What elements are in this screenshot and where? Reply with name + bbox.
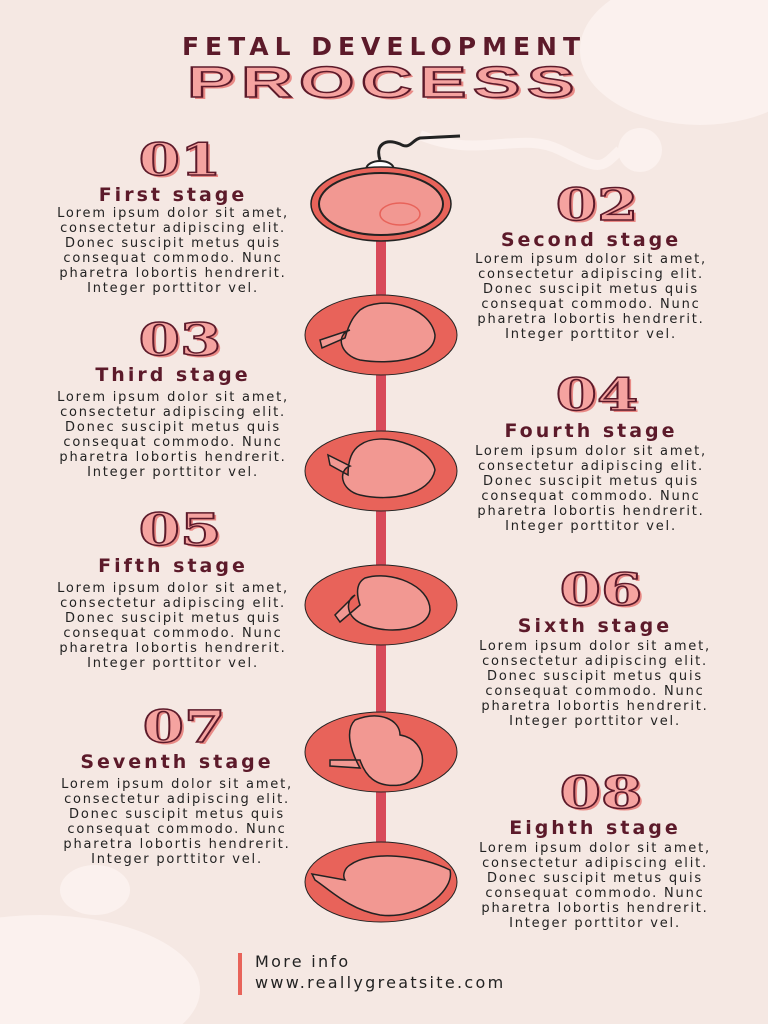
text: 07 <box>143 702 225 753</box>
timeline line <box>376 235 386 865</box>
text: consectetur adipiscing elit. <box>60 221 286 236</box>
text: Donec suscipit metus quis <box>65 420 281 435</box>
text: consequat commodo. Nunc <box>67 822 287 837</box>
title <box>182 32 586 107</box>
text: consequat commodo. Nunc <box>481 297 701 312</box>
text: Integer porttitor vel. <box>509 916 681 931</box>
text: Fourth stage <box>504 420 678 442</box>
text: consequat commodo. Nunc <box>63 626 283 641</box>
text: 08 <box>560 768 642 819</box>
stage 01 <box>57 135 289 296</box>
text: consectetur adipiscing elit. <box>60 596 286 611</box>
text: consectetur adipiscing elit. <box>60 405 286 420</box>
stage 02 <box>475 180 707 342</box>
text: Third stage <box>95 364 251 386</box>
text: pharetra lobortis hendrerit. <box>477 504 705 519</box>
text: consectetur adipiscing elit. <box>478 267 704 282</box>
text: consequat commodo. Nunc <box>485 886 705 901</box>
text: Integer porttitor vel. <box>509 714 681 729</box>
text: Lorem ipsum dolor sit amet, <box>475 252 707 267</box>
text: pharetra lobortis hendrerit. <box>59 266 287 281</box>
embryo icons <box>304 294 458 922</box>
text: Eighth stage <box>509 817 681 839</box>
text: Lorem ipsum dolor sit amet, <box>479 639 711 654</box>
text: Integer porttitor vel. <box>91 852 263 867</box>
text: Lorem ipsum dolor sit amet, <box>479 841 711 856</box>
text: Donec suscipit metus quis <box>65 611 281 626</box>
text: Donec suscipit metus quis <box>483 474 699 489</box>
text: Donec suscipit metus quis <box>487 871 703 886</box>
text: pharetra lobortis hendrerit. <box>481 901 709 916</box>
footer: more info <box>238 952 505 995</box>
text: 03 <box>139 315 221 366</box>
text: consequat commodo. Nunc <box>481 489 701 504</box>
stage 08 <box>479 768 711 931</box>
text: pharetra lobortis hendrerit. <box>63 837 291 852</box>
text: Lorem ipsum dolor sit amet, <box>57 390 289 405</box>
stage 03 <box>57 315 289 480</box>
text: 05 <box>139 505 221 556</box>
text: pharetra lobortis hendrerit. <box>59 641 287 656</box>
text: consectetur adipiscing elit. <box>482 856 708 871</box>
text: Donec suscipit metus quis <box>65 236 281 251</box>
text: consectetur adipiscing elit. <box>64 792 290 807</box>
text: pharetra lobortis hendrerit. <box>481 699 709 714</box>
text: Second stage <box>501 229 681 251</box>
title: FETAL DEVELOPMENT <box>182 32 586 61</box>
footer: more info: www.reallygreatsite.com <box>255 973 505 992</box>
text: consectetur adipiscing elit. <box>482 654 708 669</box>
text: 06 <box>560 565 642 616</box>
title: PROCESS <box>187 58 581 107</box>
text: Lorem ipsum dolor sit amet, <box>57 206 289 221</box>
text: Sixth stage <box>518 615 672 637</box>
text: First stage <box>99 184 247 206</box>
stage 06 <box>479 565 711 729</box>
text: consequat commodo. Nunc <box>485 684 705 699</box>
text: pharetra lobortis hendrerit. <box>477 312 705 327</box>
text: Integer porttitor vel. <box>87 465 259 480</box>
text: Donec suscipit metus quis <box>487 669 703 684</box>
text: 02 <box>556 180 638 231</box>
text: Fifth stage <box>98 555 248 577</box>
text: Lorem ipsum dolor sit amet, <box>475 444 707 459</box>
text: 04 <box>556 370 638 421</box>
text: consequat commodo. Nunc <box>63 435 283 450</box>
stage 07 <box>61 702 293 867</box>
text: pharetra lobortis hendrerit. <box>59 450 287 465</box>
text: Integer porttitor vel. <box>505 519 677 534</box>
text: Integer porttitor vel. <box>87 281 259 296</box>
text: Integer porttitor vel. <box>87 656 259 671</box>
footer: more info: More info <box>255 952 350 971</box>
icon: egg with sperm <box>310 134 460 242</box>
text: Donec suscipit metus quis <box>69 807 285 822</box>
text: Donec suscipit metus quis <box>483 282 699 297</box>
text: 01 <box>139 135 221 186</box>
text: Integer porttitor vel. <box>505 327 677 342</box>
text: consectetur adipiscing elit. <box>478 459 704 474</box>
text: consequat commodo. Nunc <box>63 251 283 266</box>
text: Lorem ipsum dolor sit amet, <box>57 581 289 596</box>
stage 05 <box>57 505 289 671</box>
text: Lorem ipsum dolor sit amet, <box>61 777 293 792</box>
stage 04 <box>475 370 707 534</box>
text: Seventh stage <box>80 751 274 773</box>
